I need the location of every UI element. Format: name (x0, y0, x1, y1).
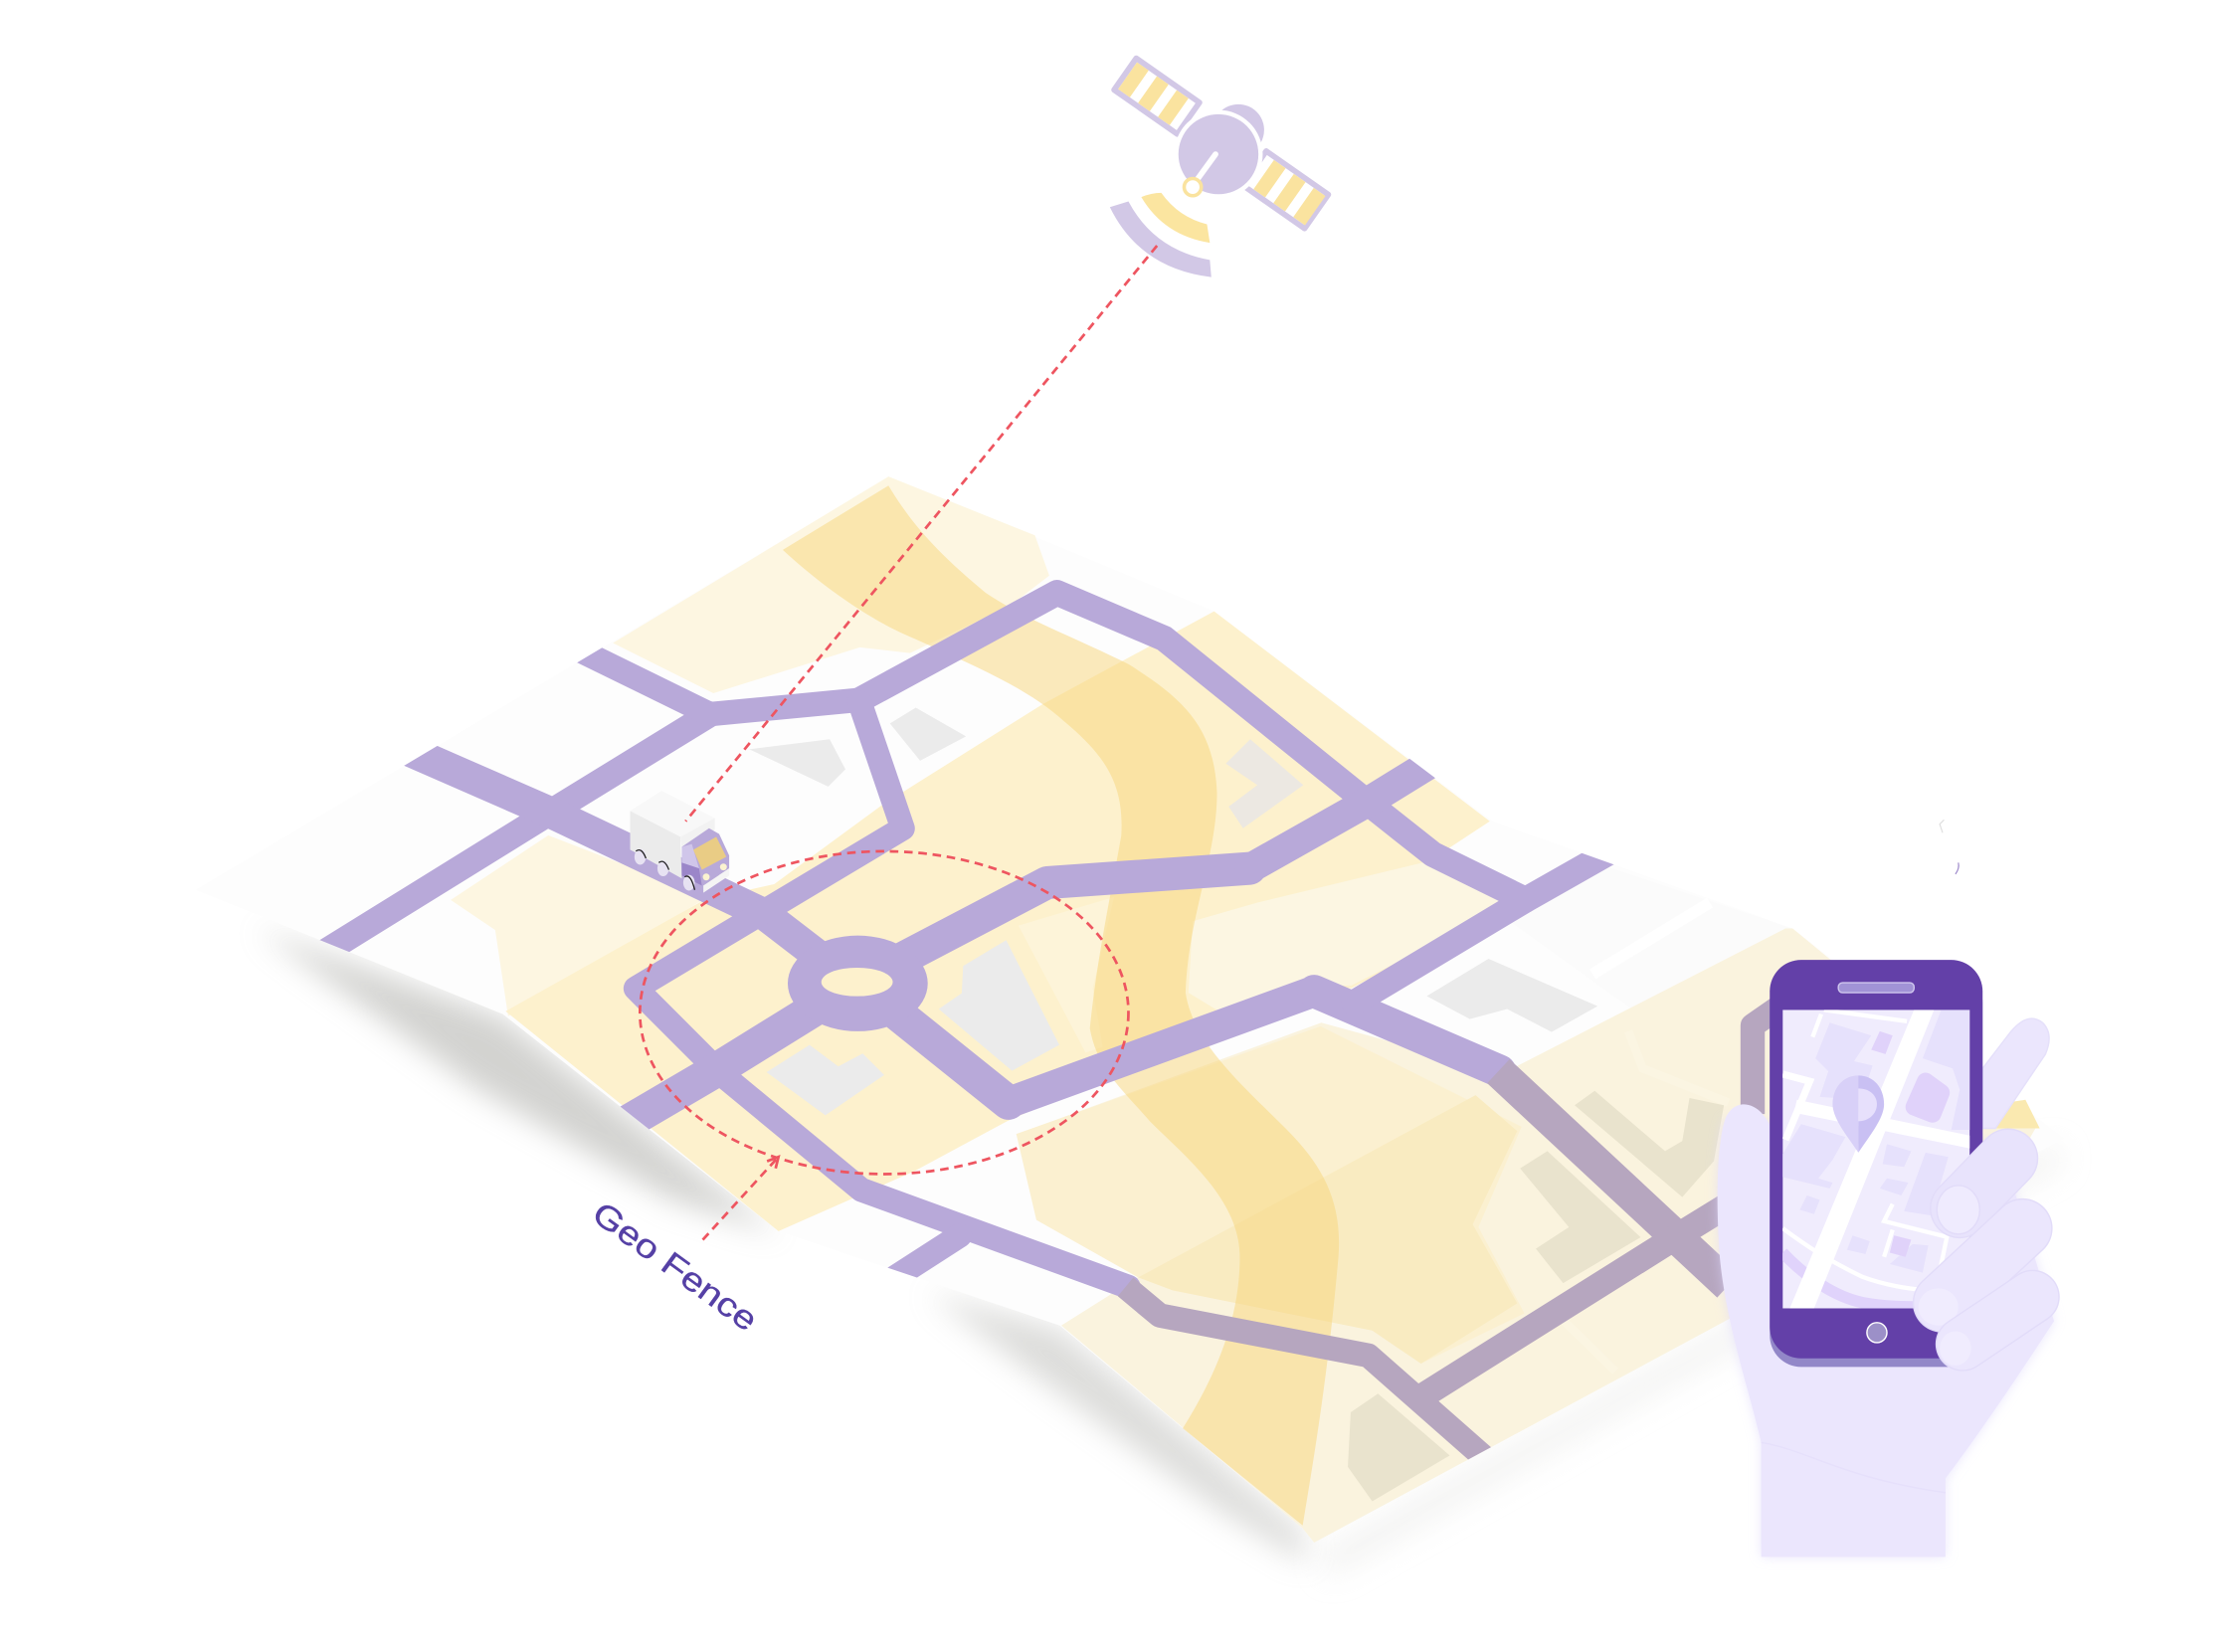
road: west avenue (404, 746, 826, 959)
speaker (1838, 983, 1914, 993)
windshield (693, 836, 726, 870)
signal wave: yellow (1141, 193, 1210, 243)
dish halo (1174, 110, 1262, 199)
nail: ring (1919, 1288, 1959, 1326)
finger: little (1962, 1297, 2032, 1344)
road: diagonal (621, 1003, 822, 1130)
roundabout centre (822, 968, 893, 997)
dish (1179, 114, 1258, 194)
index finger (1982, 1018, 2049, 1129)
road: north artery (859, 593, 1526, 900)
signal wave: purple (1110, 201, 1212, 277)
wheels (635, 849, 694, 890)
cargo box top (631, 791, 715, 836)
label: Geo Fence: Geo Fence (586, 1194, 765, 1338)
location pin (1832, 1075, 1884, 1153)
home button (1867, 1323, 1887, 1343)
east white street (1592, 903, 1710, 974)
road network (280, 593, 1621, 1293)
road: lower loop (1126, 1287, 1500, 1471)
screen curved lavender road (1782, 1252, 1921, 1307)
road: south spur (887, 1232, 970, 1277)
antenna arm (1193, 154, 1215, 186)
phone body (1770, 960, 1982, 1359)
road: south west artery (320, 701, 716, 952)
building: north 1 (749, 739, 845, 787)
geo fence dashed circle (640, 851, 1128, 1174)
pale strip: near centre (1019, 897, 1114, 1052)
road: east bend (1314, 992, 1500, 1071)
cab window side (681, 844, 699, 868)
palm crease (1762, 1442, 1946, 1493)
stray marks (1940, 820, 1959, 874)
road: north east extension (1247, 758, 1435, 878)
phone edge (1770, 972, 1982, 1367)
road: behind phone (1753, 1003, 1785, 1114)
pale area: east of centre (1189, 861, 1514, 1017)
road: loop (636, 703, 1128, 1287)
cab door (681, 862, 702, 885)
pale area: top block (613, 476, 1049, 693)
fold shade (1138, 1095, 1517, 1364)
bumper (703, 868, 729, 893)
screen map (1782, 1010, 1969, 1308)
pale side roads (1560, 1031, 1729, 1372)
corner sliver (1982, 1100, 2040, 1129)
building: centre (939, 940, 1059, 1071)
pale area: left block (451, 835, 707, 1016)
finger: middle (1959, 1159, 2008, 1208)
road: east diagonal (1354, 845, 1621, 1003)
map sheet (196, 477, 2064, 1543)
screen white roads (1782, 1010, 1969, 1308)
hand halo (1718, 1118, 2054, 1557)
cab (681, 828, 729, 885)
buildings (749, 707, 1724, 1502)
satellite (1110, 59, 1328, 277)
cargo box side (631, 811, 681, 878)
fingers over phone (1919, 1159, 2032, 1366)
solar panel left (1114, 59, 1200, 134)
building: north 2 (890, 707, 966, 761)
cargo box front (680, 819, 715, 848)
muted road network on lower map (1126, 1003, 1785, 1471)
road: lower avenue (1498, 1071, 1729, 1285)
roundabout ring (788, 936, 928, 1031)
hand holding phone (1718, 1018, 2054, 1557)
building: south east 2 (1520, 1151, 1640, 1283)
delivery truck (631, 791, 729, 893)
lower middle area (1017, 1026, 1525, 1364)
arrow: geo fence pointer (703, 1157, 779, 1240)
road: north east avenue (900, 868, 1250, 960)
building: east 1 (1225, 739, 1303, 828)
illustration: geo fence map (276, 56, 2060, 1563)
building: south (1348, 1393, 1450, 1502)
building: east 2 (1426, 959, 1597, 1032)
nail: little (1940, 1331, 1971, 1366)
road: south east avenue (871, 993, 1009, 1103)
nail: middle (1937, 1186, 1979, 1234)
antenna tip (1184, 179, 1202, 196)
screen buildings (1782, 1010, 1969, 1273)
central yellow area (505, 612, 1514, 1231)
building: south east 1 (1575, 1091, 1724, 1197)
finger: ring (1943, 1228, 2022, 1303)
road: north west spur (564, 642, 859, 714)
solar panel right (1242, 151, 1328, 229)
paper map (196, 476, 2064, 1543)
screen background (1782, 1010, 1969, 1308)
screen accents (1871, 1031, 1942, 1257)
lower map base (1017, 928, 2035, 1543)
palm and wrist (1718, 1104, 2054, 1557)
east faint block (1500, 864, 1792, 1017)
building: south west (767, 1045, 884, 1115)
headlights (703, 863, 727, 880)
river (783, 485, 1339, 1526)
map shadow (257, 928, 2064, 1578)
dome (1213, 104, 1264, 156)
road: lower diagonal (1418, 1196, 1719, 1401)
red dashed signal line (685, 246, 1157, 822)
road: south east upper (1009, 992, 1314, 1103)
smartphone (1770, 960, 1982, 1367)
